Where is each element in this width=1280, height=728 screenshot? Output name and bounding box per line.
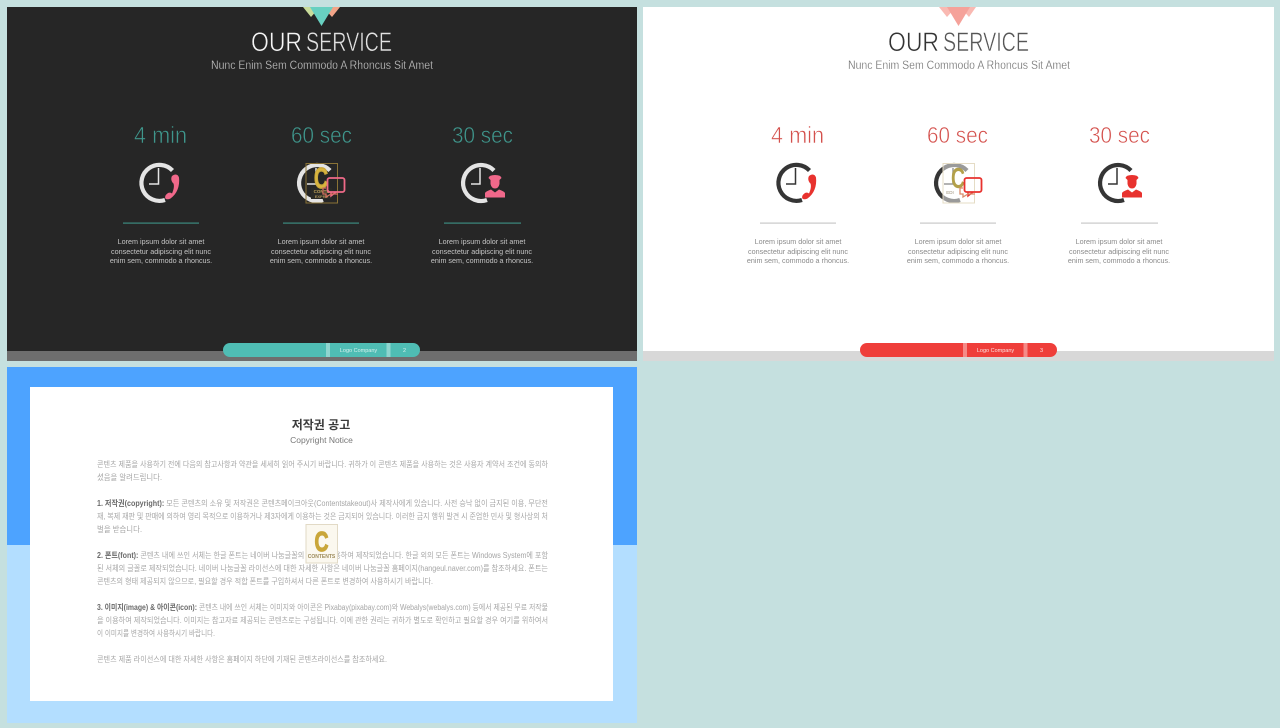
text block: intro [97, 459, 549, 482]
subtitle light: Nunc Enim Sem Commodo A Rhoncus Sit Amet [848, 60, 1071, 72]
column: 30 sec dark: 30 sec [452, 122, 513, 148]
footer pill dark [223, 343, 420, 357]
watermark: pale logo box: EDI [946, 190, 954, 195]
column: 30 sec dark: enim sem, commodo a rhoncus. [431, 256, 533, 265]
column: 60 sec light [907, 122, 1009, 265]
column: 4 min dark [110, 122, 212, 265]
column: 60 sec dark: Lorem ipsum dolor sit amet [278, 237, 364, 246]
text block: license note: 콘텐츠 제품 라이선스에 대한 자세한 사항은 홈페이지 하단에 기재된 콘텐츠라이선스를 참조하세요. [97, 654, 387, 664]
icon: clock with person [463, 165, 505, 201]
column: 30 sec dark: consectetur adipiscing elit nunc [432, 247, 532, 256]
watermark: gold logo box: EXPRE [315, 194, 329, 199]
footer pill dark: Logo Company [340, 348, 377, 354]
icon: header triangles light [939, 7, 976, 26]
icon: clock with chat [299, 163, 344, 203]
column: 30 sec light: Lorem ipsum dolor sit amet [1076, 237, 1162, 246]
text block: intro: 콘텐츠 제품을 사용하기 전에 다음의 참고사항과 약관을 세세히 읽어 주시기 바랍니다. 귀하가 이 콘텐츠 제품을 사용하는 것은 사용자 계약서 조건에 동의하 [97, 459, 549, 469]
title light: OUR [888, 27, 939, 57]
text block: image and icon clause: 3. 이미지(image) & 아이콘(icon): 콘텐츠 내에 쓰인 서체는 이미지와 아이콘은 Pixabay(pixabay.com)와 Webalys(webalys.com) 등에서 제공된 무료 저작물 [97, 602, 548, 612]
text block: copyright clause: 재, 복제 재판 및 판매에 의하여 영리 목적으로 이용하거나 제3자에게 이용하는 것은 금지되어 있습니다. 이러한 금지 행위 발견 시 준엄한 민사 및 형사상의 처 [97, 511, 548, 521]
watermark: pale logo box [943, 163, 974, 203]
watermark: gold logo box: CONTENTS [308, 554, 336, 560]
watermark: gold logo box [306, 163, 338, 203]
title light [888, 27, 1029, 57]
watermark: pale logo box: C [951, 163, 965, 195]
watermark: gold logo box: C [314, 526, 328, 557]
column: 60 sec dark [270, 122, 372, 265]
column: 4 min light: Lorem ipsum dolor sit amet [755, 237, 841, 246]
column: 4 min dark: consectetur adipiscing elit nunc [111, 247, 211, 256]
icon: clock with phone [778, 165, 816, 201]
column: 60 sec light: consectetur adipiscing elit nunc [908, 247, 1008, 256]
column: 30 sec dark [431, 122, 533, 265]
icon: clock with person [1100, 165, 1142, 201]
column: 30 sec light: consectetur adipiscing elit nunc [1069, 247, 1169, 256]
icon: header triangles dark [303, 7, 340, 26]
title dark [251, 27, 392, 57]
text block: font clause [97, 550, 549, 586]
title dark: SERVICE [306, 27, 392, 57]
column: 30 sec light [1068, 122, 1170, 265]
column: 4 min light [747, 122, 849, 265]
footer pill light [860, 343, 1057, 357]
watermark: gold logo box: C [314, 163, 328, 195]
column: 60 sec light: Lorem ipsum dolor sit amet [915, 237, 1001, 246]
watermark: gold logo box: CONTE [314, 189, 329, 194]
icon: clock with phone [141, 165, 179, 201]
column: 60 sec light: enim sem, commodo a rhoncus. [907, 256, 1009, 265]
footer pill light: 3 [1040, 348, 1043, 354]
title light: SERVICE [943, 27, 1029, 57]
column: 4 min dark: Lorem ipsum dolor sit amet [118, 237, 204, 246]
text block: image and icon clause: 을 이용하여 제작되었습니다. 이미지는 참고자료 제공되는 콘텐츠로는 구성됩니다. 이에 관한 권리는 귀하가 별도로 확인하고 필요할 경우 여기를 위하여서 [97, 615, 548, 625]
text block: copyright clause: 1. 저작권(copyright): 모든 콘텐츠의 소유 및 저작권은 콘텐츠메이크아웃(Contentstakeout)사 제작사에게 있습니다. 사전 승낙 없이 금지된 이용, 무단전 [97, 498, 548, 508]
column: 4 min dark: enim sem, commodo a rhoncus. [110, 256, 212, 265]
heading: copyright title: 저작권 공고 [292, 417, 350, 432]
column: 60 sec dark: 60 sec [291, 122, 352, 148]
column: 30 sec dark: Lorem ipsum dolor sit amet [439, 237, 525, 246]
column: 60 sec dark: enim sem, commodo a rhoncus. [270, 256, 372, 265]
watermark: gold logo box [306, 524, 338, 563]
text block: image and icon clause: 이 이미지를 변경하여 사용하시기 바랍니다. [97, 628, 215, 638]
panel: copyright notice slide [7, 367, 637, 723]
column: 60 sec dark: consectetur adipiscing elit nunc [271, 247, 371, 256]
text block: font clause: 2. 폰트(font): 콘텐츠 내에 쓰인 서체는 한글 폰트는 네이버 나눔글꼴의 서체를 사용하여 제작되었습니다. 한글 외의 모든 폰트는 Windows System에 포함 [97, 550, 549, 560]
column: 60 sec light: 60 sec [927, 122, 988, 148]
text block: copyright clause [97, 498, 548, 534]
footer pill light: Logo Company [977, 348, 1014, 354]
column: 4 min light: consectetur adipiscing elit nunc [748, 247, 848, 256]
column: 4 min light: 4 min [771, 122, 824, 148]
heading: copyright subtitle: Copyright Notice [290, 435, 353, 445]
text block: copyright clause: 벌을 받습니다. [97, 524, 142, 534]
column: 30 sec light: 30 sec [1089, 122, 1150, 148]
text block: font clause: 콘텐츠의 형태 제공되지 않으므로, 필요할 경우 적합 폰트를 구입하셔서 다른 폰트로 변경하여 사용하시기 바랍니다. [97, 576, 433, 586]
column: 4 min dark: 4 min [134, 122, 187, 148]
subtitle dark: Nunc Enim Sem Commodo A Rhoncus Sit Amet [211, 60, 434, 72]
panel: dark service slide [7, 7, 637, 361]
title dark: OUR [251, 27, 302, 57]
column: 30 sec light: enim sem, commodo a rhoncus. [1068, 256, 1170, 265]
text block: font clause: 된 서체의 글꼴로 제작되었습니다. 네이버 나눔글꼴 라이선스에 대한 자세한 사항은 네이버 나눔글꼴 홈페이지(hangeul.naver.com)를 참조하세요. 폰트는 [97, 563, 548, 573]
text block: image and icon clause [97, 602, 548, 638]
footer pill dark: 2 [403, 348, 406, 354]
panel: light service slide [643, 7, 1274, 361]
text block: intro: 셨음을 알려드립니다. [97, 472, 162, 482]
icon: clock with chat [936, 163, 982, 203]
column: 4 min light: enim sem, commodo a rhoncus. [747, 256, 849, 265]
